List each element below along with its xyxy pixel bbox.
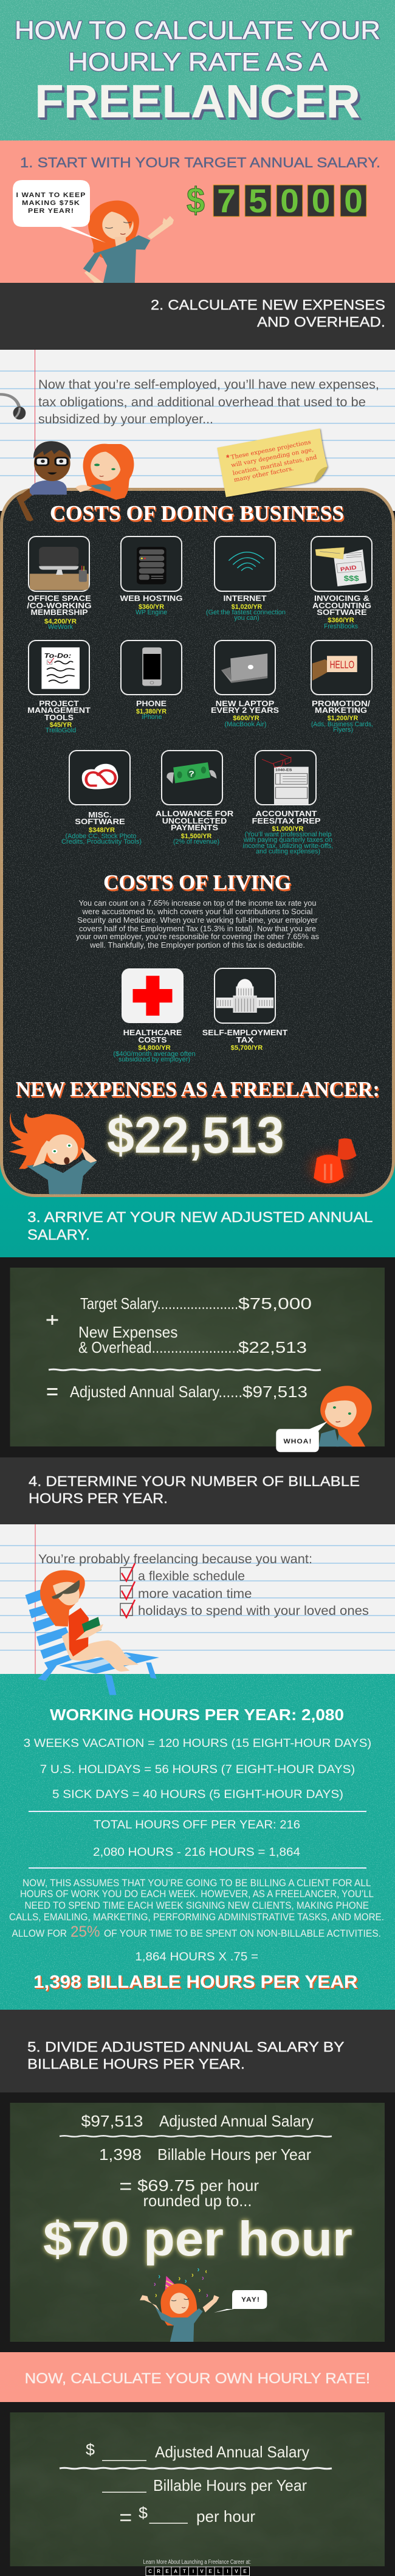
equation: result rounded: $69.75 — [137, 2176, 195, 2195]
logo: creativelive — [146, 2567, 249, 2575]
checklist: reasons: more vacation time — [138, 1587, 252, 1601]
footer: learn more: Learn More About Launching a Freelance Career at: — [143, 2559, 251, 2566]
icon: flying money: ? — [188, 770, 194, 779]
label: misc software cost: $348/YR — [89, 827, 115, 834]
label: misc software cost: SOFTWARE — [75, 817, 125, 826]
list: time off: 3 WEEKS VACATION = 120 HOURS (15 EIGHT-HOUR DAYS) — [24, 1737, 371, 1750]
equation: adjusted annual salary: Adjusted Annual Salary...... — [70, 1383, 242, 1401]
result: $70 per hour: $70 per hour — [43, 2212, 352, 2266]
equation: new expenses and overhead: New Expenses — [78, 1323, 177, 1341]
tile: office space — [27, 536, 92, 631]
heading: costs of doing business: COSTS OF DOING BUSINESS — [50, 501, 344, 525]
worksheet: salary line — [86, 2440, 309, 2461]
text block: intro paragraph: Now that you’re self-employed, you’ll have new expenses, — [38, 378, 379, 392]
icon: laptop — [221, 653, 267, 683]
total: hours off — [93, 1819, 300, 1859]
label: accountant cost: and cutting expenses) — [256, 848, 320, 855]
logo: creativelive: I — [227, 2569, 228, 2574]
icon: desk and monitor — [30, 547, 89, 590]
worksheet: per hour line: per hour — [196, 2507, 255, 2526]
logo: creativelive: R — [157, 2569, 160, 2574]
salary counter: $75000: $ — [187, 181, 205, 220]
sticky note: expense projections disclaimer: * — [226, 453, 230, 462]
label: uncollected payments cost: $1,500/YR — [181, 833, 211, 840]
tile: web hosting — [120, 536, 182, 616]
sticky note: expense projections disclaimer: location, marital status, and — [232, 454, 317, 477]
icon: to-do list: To-Do: — [44, 651, 71, 659]
text: you're probably freelancing because you want: You’re probably freelancing because you want: — [38, 1552, 312, 1566]
speech bubble: want to keep making $75k: PER YEAR! — [28, 207, 74, 215]
text block: non-billable explanation: 25% — [70, 1923, 100, 1940]
sticky note: expense projections disclaimer: many other factors. — [233, 465, 294, 484]
label: accountant cost: $1,000/YR — [272, 825, 304, 833]
salary counter: $75000: 7 — [217, 182, 236, 220]
label: invoicing cost: $360/YR — [328, 617, 354, 624]
speech bubble: whoa — [276, 1429, 319, 1452]
label: promotion cost: (Ads, Business Cards, — [311, 721, 373, 728]
label: accountant cost: income tax, utilizing write-offs, — [243, 842, 333, 850]
illustration: woman pointing at salary — [83, 201, 174, 283]
panel: step 5 heading — [0, 2010, 395, 2092]
icon: creative cloud — [82, 764, 118, 789]
icon: cheque and paid invoice: $$$ — [344, 574, 359, 583]
equation: numerator: $97,513 — [81, 2112, 143, 2130]
speech bubble: whoa: WHOA! — [283, 1438, 312, 1445]
worksheet: hours line: Billable Hours per Year — [153, 2476, 307, 2494]
tile: phone — [121, 641, 182, 721]
label: laptop cost — [211, 699, 279, 728]
equation: result rounded: rounded up to... — [143, 2192, 252, 2210]
text block: costs of living paragraph: Security and Medicare. When you’re working full-time, your employer — [77, 915, 318, 925]
sticky note: expense projections disclaimer — [217, 428, 328, 497]
text block: intro paragraph: subsidized by your employer... — [38, 412, 213, 426]
logo: creativelive: I — [193, 2569, 194, 2574]
text block: intro paragraph: tax obligations, and additional overhead that used to be — [38, 395, 366, 409]
salary counter: $75000: 5 — [249, 182, 267, 220]
title: how to calculate your hourly rate as a — [15, 16, 380, 76]
salary counter: $75000: 0 — [344, 182, 363, 220]
label: project management cost: PROJECT — [39, 699, 79, 708]
logo: creativelive: E — [243, 2569, 247, 2574]
label: promotion cost — [311, 699, 373, 734]
panel: title header — [0, 0, 395, 141]
worksheet: per hour line: $ — [139, 2504, 148, 2522]
label: internet cost: $1,020/YR — [232, 603, 262, 611]
title: how to calculate your hourly rate as a: HOURLY RATE AS A — [68, 47, 328, 76]
label: internet cost: (Get the fastest connection — [206, 609, 286, 616]
equation: result rounded — [120, 2176, 259, 2210]
text block: intro paragraph — [38, 378, 379, 426]
label: promotion cost: PROMOTION/ — [312, 699, 370, 708]
label: internet cost: you can) — [234, 614, 259, 622]
label: accountant cost — [243, 809, 333, 855]
checklist: reasons — [120, 1563, 369, 1618]
equation: denominator: 1,398 — [99, 2145, 142, 2164]
panel: chalkboard adjusted salary — [0, 1257, 395, 1457]
text block: non-billable explanation — [9, 1877, 384, 1940]
label: accountant cost: FEES/TAX PREP — [252, 816, 321, 825]
label: web hosting cost: $360/YR — [139, 603, 164, 611]
icon: cheque and paid invoice — [315, 547, 366, 586]
label: invoicing cost: INVOICING & — [314, 594, 369, 603]
text block: non-billable explanation: ALLOW FOR — [12, 1928, 67, 1939]
label: healthcare cost: $4,800/YR — [138, 1044, 171, 1052]
label: promotion cost: MARKETING — [315, 706, 367, 715]
equation: target salary: Target Salary...................... — [80, 1294, 238, 1313]
panel: step 5 heading: 5. DIVIDE ADJUSTED ANNUAL SALARY BY — [27, 2039, 345, 2055]
icon: tax form and glasses — [262, 754, 309, 804]
symbol: equals — [47, 1389, 57, 1394]
heading: step 1: 1. START WITH YOUR TARGET ANNUAL SALARY. — [20, 154, 380, 170]
label: uncollected payments cost — [156, 809, 234, 845]
logo: creativelive: L — [218, 2569, 221, 2574]
icon: cheque and paid invoice: PAID — [340, 564, 357, 573]
list: time off: 5 SICK DAYS = 40 HOURS (5 EIGHT-HOUR DAYS) — [52, 1788, 343, 1801]
label: promotion cost: Flyers) — [333, 726, 353, 734]
speech bubble: want to keep making $75k: I WANT TO KEEP — [16, 192, 86, 199]
logo: creativelive: E — [165, 2569, 169, 2574]
label: invoicing cost: ACCOUNTING — [312, 601, 371, 610]
text block: costs of living paragraph: well. Thankfully, the Employer portion of this tax is deductible. — [89, 940, 305, 950]
label: self-employment tax cost: TAX — [236, 1035, 254, 1044]
result: billable hours: 1,398 BILLABLE HOURS PER YEAR — [33, 1972, 358, 1992]
label: misc software cost: MISC. — [88, 810, 112, 819]
heading: new expenses as a freelancer: NEW EXPENSES AS A FREELANCER: — [16, 1077, 380, 1101]
speech bubble: yay: YAY! — [241, 2296, 260, 2303]
equation: new expenses and overhead: & Overhead....................... — [78, 1338, 239, 1356]
icon: to-do list — [41, 647, 80, 689]
text block: costs of living paragraph: You can count on a 7.65% increase on top of the income tax rate you — [79, 898, 316, 908]
label: invoicing cost: FreshBooks — [324, 623, 358, 630]
panel: chalkboard expenses background — [0, 489, 395, 1257]
label: office space cost: OFFICE SPACE — [27, 594, 91, 603]
salary counter: $75000: 0 — [312, 182, 330, 220]
text block: costs of living paragraph: were accustomed to, which covers your full contributions to Social — [81, 907, 313, 916]
label: laptop cost: (MacBook Air) — [225, 721, 266, 728]
speech bubble: want to keep making $75k — [13, 180, 106, 243]
label: healthcare cost: HEALTHCARE — [123, 1028, 182, 1037]
label: project management cost — [27, 699, 91, 734]
sticky note: expense projections disclaimer: These expense projections — [230, 439, 312, 461]
label: internet cost: INTERNET — [224, 594, 267, 603]
illustration: celebrating woman with party hat — [140, 2268, 219, 2342]
worksheet: salary line: Adjusted Annual Salary — [155, 2443, 309, 2461]
label: laptop cost: $600/YR — [233, 715, 259, 722]
checklist: reasons: holidays to spend with your loved ones — [138, 1604, 369, 1618]
label: healthcare cost — [113, 1028, 196, 1063]
title: freelancer: FREELANCER — [35, 75, 360, 128]
illustration: panicked woman — [9, 1112, 97, 1194]
illustration: flying red lanterns — [313, 1138, 357, 1183]
tile: promotion — [311, 641, 373, 734]
label: invoicing cost: SOFTWARE — [317, 608, 367, 617]
label: project management cost: TrelloGold — [46, 727, 76, 734]
tile: self-employment tax — [202, 968, 287, 1052]
tile: internet — [206, 536, 286, 622]
icon: notebook binder ring — [0, 394, 26, 420]
total: $22,513: $22,513 — [107, 1106, 284, 1164]
icon: server — [137, 547, 167, 585]
icon: capitol building — [216, 979, 273, 1013]
label: self-employment tax cost: SELF-EMPLOYMENT — [202, 1028, 287, 1037]
label: project management cost: TOOLS — [44, 713, 74, 722]
text block: costs of living paragraph: your own employer, you’re responsible for covering the other 7.65% as — [76, 932, 319, 941]
label: uncollected payments cost: PAYMENTS — [171, 823, 218, 832]
icon: wifi — [228, 552, 264, 571]
label: phone cost: PHONE — [136, 699, 167, 708]
label: web hosting cost — [120, 594, 182, 616]
label: self-employment tax cost — [202, 1028, 287, 1052]
label: accountant cost: with paying quarterly taxes on — [243, 836, 332, 844]
sticky note: expense projections disclaimer: will vary depending on age, — [230, 446, 314, 469]
panel: chalkboard hourly rate result — [0, 2092, 395, 2352]
panel: working hours calculation — [0, 1674, 395, 2010]
label: office space cost: MEMBERSHIP — [30, 608, 88, 617]
label: project management cost: MANAGEMENT — [27, 706, 91, 715]
list: time off: 7 U.S. HOLIDAYS = 56 HOURS (7 EIGHT-HOUR DAYS) — [40, 1763, 355, 1776]
label: promotion cost: $1,200/YR — [328, 715, 358, 722]
panel: step 2 heading — [0, 283, 395, 350]
label: web hosting cost: WP Engine — [136, 609, 167, 616]
tile: healthcare — [113, 968, 196, 1063]
heading: costs of living: COSTS OF LIVING — [103, 870, 291, 894]
panel: step 4 heading — [0, 1457, 395, 1524]
title: how to calculate your hourly rate as a: HOW TO CALCULATE YOUR — [15, 16, 380, 44]
label: self-employment tax cost: $5,700/YR — [231, 1044, 263, 1052]
panel: step 3 heading: SALARY. — [27, 1227, 90, 1243]
label: laptop cost: EVERY 2 YEARS — [211, 706, 279, 715]
equation: result rounded: per hour — [200, 2176, 259, 2195]
speech bubble: yay — [214, 2290, 267, 2313]
panel: notebook paper freelance reasons — [0, 1524, 395, 1674]
worksheet: per hour line — [120, 2504, 255, 2526]
panel: step 3 heading — [27, 1209, 373, 1243]
panel: notebook paper intro — [0, 350, 395, 511]
symbol: plus — [46, 1315, 58, 1325]
label: healthcare cost: subsidized by employer) — [118, 1056, 190, 1063]
panel: step 5 heading: BILLABLE HOURS PER YEAR. — [27, 2056, 245, 2072]
logo: creativelive: T — [183, 2569, 186, 2574]
logo: creativelive: E — [208, 2569, 212, 2574]
label: healthcare cost: ($400/month average often — [113, 1050, 196, 1058]
speech bubble: want to keep making $75k: MAKING $75K — [22, 200, 80, 207]
total: hours off: TOTAL HOURS OFF PER YEAR: 216 — [94, 1819, 300, 1831]
logo: creativelive: V — [235, 2569, 238, 2574]
equation: numerator — [81, 2112, 314, 2130]
label: web hosting cost: WEB HOSTING — [120, 594, 182, 603]
worksheet: salary line: $ — [86, 2440, 95, 2459]
icon: flying money — [167, 762, 216, 783]
panel: calculate your own call to action: NOW, CALCULATE YOUR OWN HOURLY RATE! — [25, 2370, 370, 2387]
label: accountant cost: (You’ll want professional help — [244, 831, 332, 838]
icon: smartphone — [142, 647, 162, 686]
label: misc software cost: (Adobe CC, Stock Photo — [66, 833, 136, 840]
label: misc software cost — [61, 810, 142, 845]
illustration: woman reading on beach chair — [25, 1570, 159, 1695]
salary counter: $75000 — [187, 181, 366, 220]
icon: tax form and glasses: 1040-ES — [275, 768, 292, 772]
panel: step 4 heading: HOURS PER YEAR. — [29, 1490, 168, 1506]
panel: calculate your own call to action — [0, 2352, 395, 2402]
panel: step 3 heading: 3. ARRIVE AT YOUR NEW ADJUSTED ANNUAL — [27, 1209, 373, 1226]
label: office space cost: $4,200/YR — [44, 618, 77, 625]
tile: accountant fees — [243, 751, 333, 855]
label: accountant cost: ACCOUNTANT — [255, 809, 317, 818]
equation: adjusted annual salary: $97,513 — [242, 1383, 307, 1401]
heading: working hours per year: WORKING HOURS PER YEAR: 2,080 — [50, 1706, 344, 1724]
label: healthcare cost: COSTS — [139, 1035, 167, 1044]
panel: step 4 heading: 4. DETERMINE YOUR NUMBER OF BILLABLE — [29, 1473, 360, 1489]
panel: step 2 heading: AND OVERHEAD. — [257, 314, 385, 330]
icon: hand with hello card: HELLO — [330, 659, 354, 671]
label: uncollected payments cost: (2% of revenue) — [173, 838, 219, 845]
logo: creativelive: A — [174, 2569, 177, 2574]
tile: uncollected payments — [156, 751, 234, 845]
label: office space cost: WeWork — [48, 623, 73, 631]
label: laptop cost: NEW LAPTOP — [216, 699, 275, 708]
total: hours off: 2,080 HOURS - 216 HOURS = 1,864 — [93, 1846, 300, 1859]
list: time off — [24, 1737, 371, 1801]
label: uncollected payments cost: ALLOWANCE FOR — [156, 809, 234, 818]
illustration: surprised woman — [309, 1386, 372, 1446]
label: project management cost: $45/YR — [50, 721, 72, 729]
label: office space cost — [27, 594, 92, 631]
label: uncollected payments cost: UNCOLLECTED — [162, 816, 227, 825]
tile: project management — [27, 641, 91, 734]
label: invoicing cost — [312, 594, 371, 630]
equation: denominator: Billable Hours per Year — [157, 2145, 311, 2164]
equation: new expenses and overhead — [78, 1323, 307, 1356]
label: misc software cost: Credits, Productivity Tools) — [61, 838, 142, 845]
tile: invoicing software — [311, 536, 372, 630]
checklist: reasons: a flexible schedule — [138, 1569, 245, 1583]
equation: new expenses and overhead: $22,513 — [238, 1338, 307, 1356]
text block: costs of living paragraph: covers half of the Employment Tax (15.3% in total). Now that you are — [79, 924, 316, 933]
panel: step 2 heading: 2. CALCULATE NEW EXPENSES — [151, 297, 385, 313]
panel: chalkboard fill-in worksheet — [0, 2402, 395, 2576]
logo: creativelive: C — [148, 2569, 152, 2574]
equation: target salary: $75,000 — [238, 1294, 312, 1313]
text: 1,864 x .75: 1,864 HOURS X .75 = — [135, 1951, 258, 1963]
label: phone cost: iPhone — [142, 713, 162, 721]
text block: costs of living paragraph — [76, 898, 319, 950]
label: phone cost: $1,380/YR — [136, 708, 167, 715]
equation: numerator: Adjusted Annual Salary — [159, 2112, 314, 2130]
logo: creativelive: V — [200, 2569, 204, 2574]
salary counter: $75000: 0 — [280, 182, 299, 220]
label: phone cost — [136, 699, 167, 721]
tile: misc software — [61, 751, 142, 845]
icon: red cross — [132, 976, 173, 1016]
text block: non-billable explanation: NOW, THIS ASSUMES THAT YOU’RE GOING TO BE BILLING A CLIENT FOR ALL — [22, 1877, 371, 1889]
label: internet cost — [206, 594, 286, 622]
icon: hand with hello card — [312, 656, 357, 681]
label: office space cost: /CO-WORKING — [27, 601, 92, 610]
illustration: man and woman peeking over board — [16, 441, 134, 521]
tile: laptop — [211, 641, 279, 728]
panel: step 1 target salary — [0, 141, 395, 283]
